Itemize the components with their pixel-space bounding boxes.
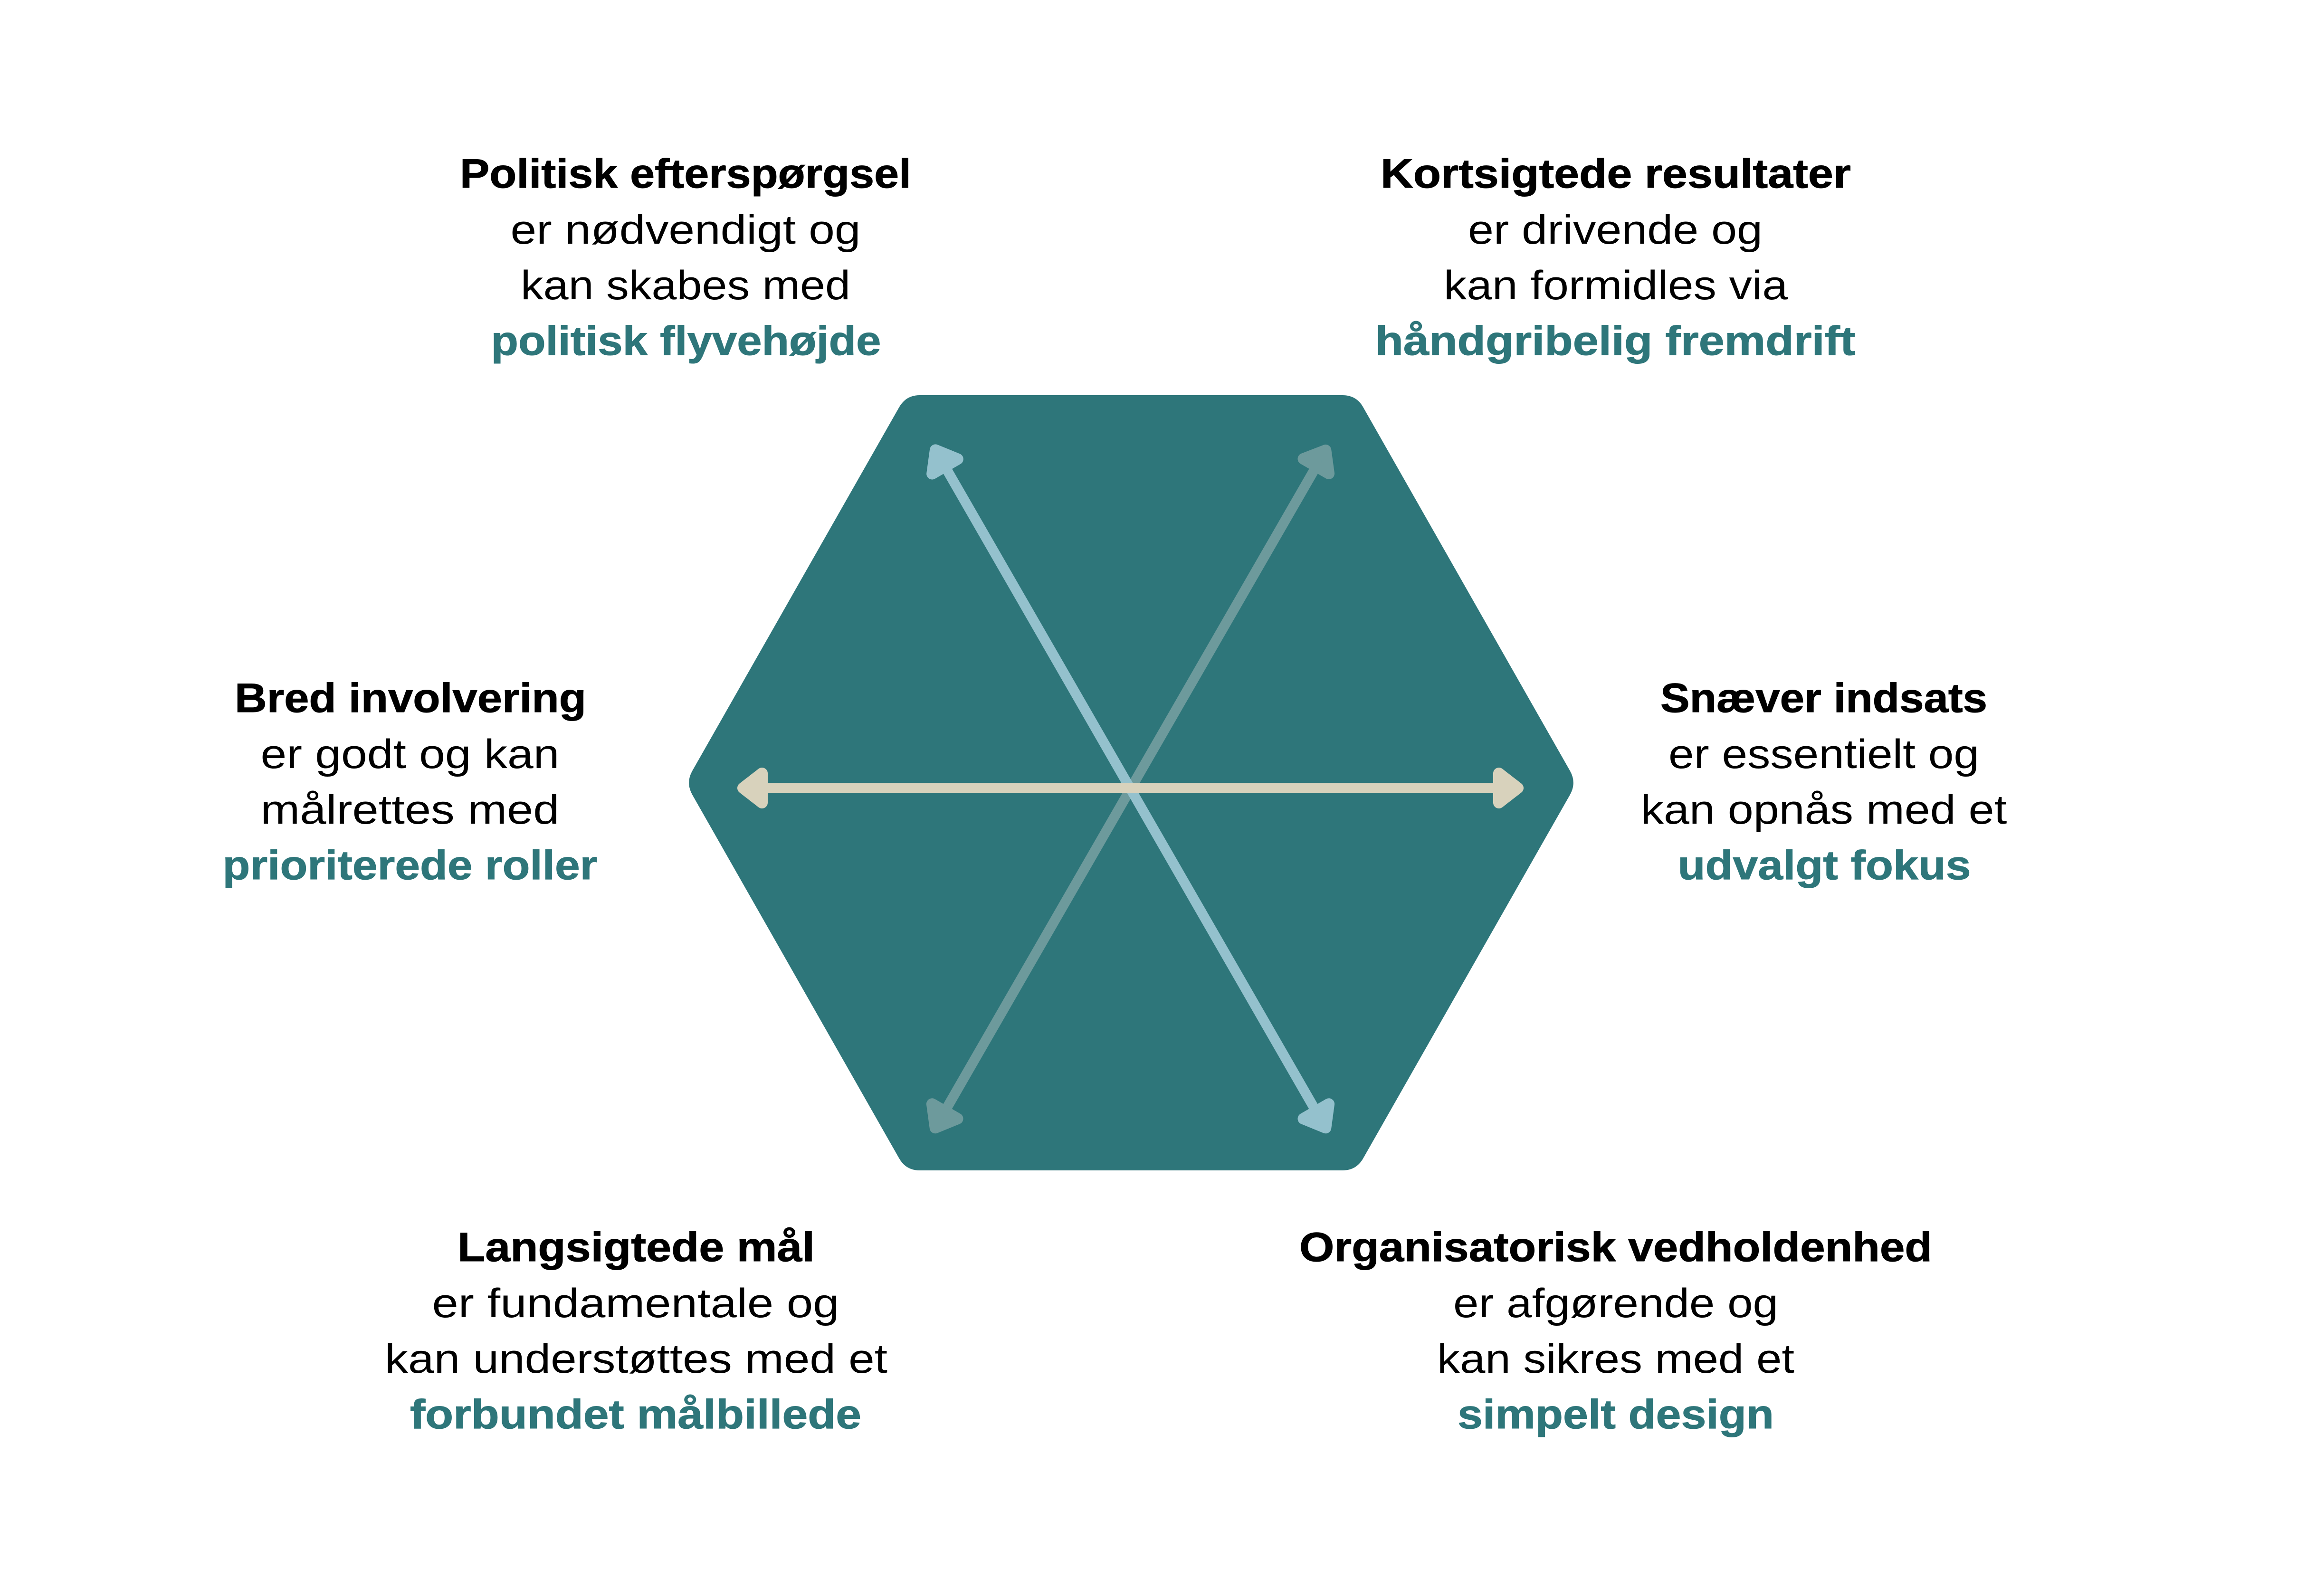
heading: Langsigtede mål: [457, 1225, 815, 1270]
heading: Bred involvering: [235, 675, 586, 721]
text block: Politisk efterspørgsel: [460, 151, 911, 364]
arrow: light blue diagonal, top-left to bottom-right: [932, 450, 1329, 1128]
text block: Snæver indsats: [1641, 675, 2007, 888]
text block: Bred involvering: [222, 675, 598, 888]
body line 2: kan formidles via: [1444, 263, 1788, 308]
highlighted key phrase: udvalgt fokus: [1678, 843, 1971, 888]
hexagon background: [689, 395, 1573, 1170]
highlighted key phrase: simpelt design: [1458, 1392, 1774, 1437]
heading: Kortsigtede resultater: [1381, 151, 1851, 197]
body line 2: kan sikres med et: [1437, 1336, 1794, 1382]
hexagon with arrows: [689, 395, 1573, 1170]
arrow: cream horizontal, left to right: [743, 773, 1518, 803]
body line 2: målrettes med: [260, 787, 560, 833]
body line 1: er fundamentale og: [432, 1281, 839, 1326]
highlighted key phrase: prioriterede roller: [222, 843, 598, 888]
body line 2: kan opnås med et: [1641, 787, 2007, 833]
body line 1: er nødvendigt og: [510, 207, 861, 253]
body line 2: kan understøttes med et: [385, 1336, 887, 1382]
arrow: muted diagonal, bottom-left to top-right: [932, 450, 1329, 1128]
heading: Snæver indsats: [1660, 675, 1987, 721]
body line 1: er godt og kan: [260, 732, 560, 777]
heading: Organisatorisk vedholdenhed: [1299, 1225, 1932, 1270]
body line 1: er drivende og: [1468, 207, 1763, 253]
text block: Langsigtede mål: [385, 1225, 887, 1437]
text block: Organisatorisk vedholdenhed: [1299, 1225, 1932, 1437]
body line 1: er essentielt og: [1668, 732, 1979, 777]
highlighted key phrase: politisk flyvehøjde: [491, 318, 881, 364]
body line 1: er afgørende og: [1453, 1281, 1778, 1326]
highlighted key phrase: forbundet målbillede: [410, 1392, 861, 1437]
body line 2: kan skabes med: [521, 263, 850, 308]
heading: Politisk efterspørgsel: [460, 151, 911, 197]
highlighted key phrase: håndgribelig fremdrift: [1375, 318, 1856, 364]
text block: Kortsigtede resultater: [1375, 151, 1856, 364]
